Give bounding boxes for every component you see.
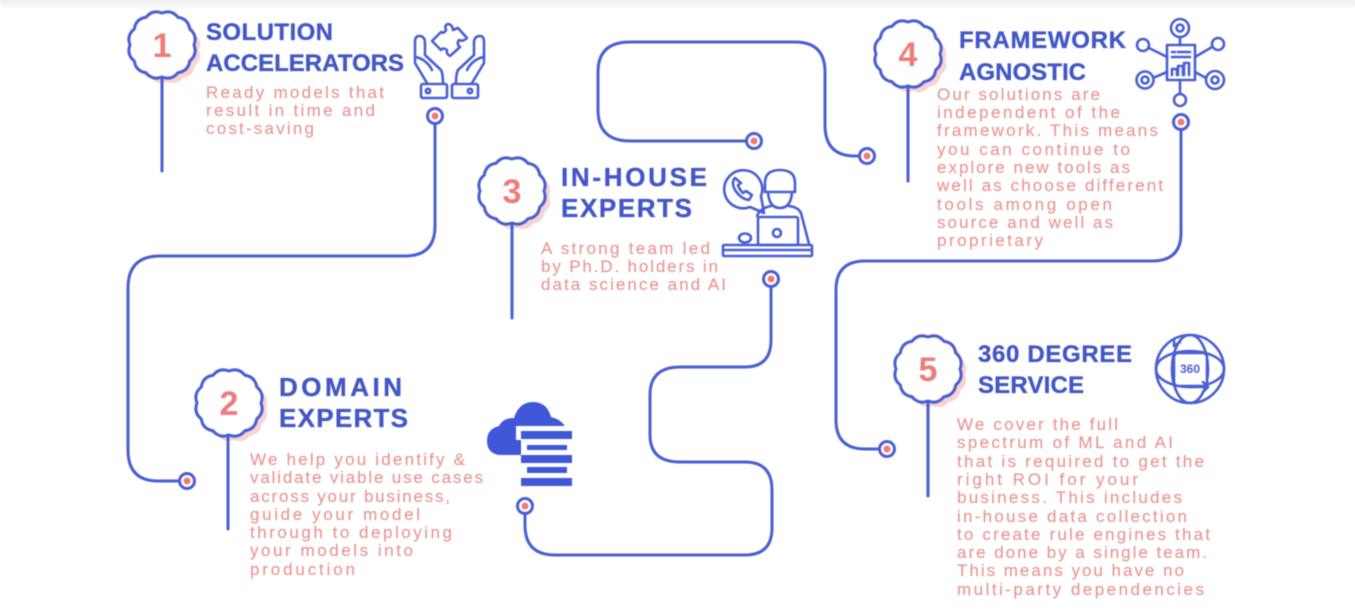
body text: that is required to get the	[957, 452, 1204, 471]
body text: through to deploying	[250, 523, 452, 542]
body text: independent of the	[937, 103, 1120, 122]
body text: right ROI for your	[957, 470, 1138, 489]
heading: ACCELERATORS	[206, 50, 404, 77]
body text	[541, 239, 726, 294]
heading: EXPERTS	[561, 193, 692, 223]
connector: step 1 to step 2	[128, 108, 442, 488]
body text: explore new tools as	[937, 158, 1130, 177]
icon: framework network	[1136, 19, 1224, 106]
heading	[561, 162, 707, 223]
panel: step 1 solution accelerators	[129, 12, 484, 171]
body text: This means you have no	[957, 561, 1184, 580]
connector: step 4 to step 5	[836, 114, 1188, 456]
body text: Ready models that	[206, 83, 384, 102]
heading	[279, 372, 408, 433]
heading: DOMAIN	[279, 372, 402, 402]
icon: hands holding puzzle piece	[415, 24, 484, 98]
badge 4	[875, 21, 946, 181]
panel: step 5 360 degree service	[895, 335, 1224, 599]
panel: step 2 domain experts	[196, 370, 483, 579]
icon: 360 globe	[1156, 335, 1224, 403]
heading: SOLUTION	[206, 19, 333, 46]
badge 5	[895, 336, 966, 496]
heading: AGNOSTIC	[959, 59, 1086, 86]
heading	[959, 27, 1127, 86]
body text: business. This includes	[957, 488, 1182, 507]
connector: step 3 to cloud	[518, 272, 778, 555]
icon: 360 globe: 360	[1180, 362, 1200, 376]
body text: in-house data collection	[957, 507, 1187, 526]
body text: validate viable use cases	[250, 468, 483, 487]
body text: to create rule engines that	[957, 525, 1210, 544]
body text: tools among open	[937, 195, 1112, 214]
heading	[206, 19, 404, 77]
body text: well as choose different	[936, 176, 1163, 195]
body text: by Ph.D. holders in	[541, 257, 718, 276]
badge 1	[129, 12, 200, 171]
heading: EXPERTS	[279, 403, 408, 433]
heading	[978, 341, 1132, 399]
panel: step 3 in-house experts	[479, 158, 812, 318]
body text: your models into	[250, 541, 413, 560]
badge 5: 5	[919, 351, 937, 389]
heading: FRAMEWORK	[959, 27, 1127, 54]
body text: proprietary	[937, 231, 1044, 250]
icon: cloud server stack	[487, 402, 572, 486]
body text: cost-saving	[206, 119, 314, 138]
body text: multi-party dependencies	[957, 580, 1204, 599]
body text: spectrum of ML and AI	[957, 433, 1173, 452]
body text: Our solutions are	[937, 85, 1100, 104]
body text: you can continue to	[937, 140, 1130, 159]
badge 2	[196, 370, 267, 529]
body text: A strong team led	[541, 239, 710, 258]
body text: across your business,	[250, 487, 450, 506]
body text: We help you identify &	[250, 450, 466, 469]
badge 3: 3	[503, 173, 521, 211]
body text: result in time and	[206, 101, 375, 120]
body text	[957, 415, 1210, 599]
badge 4: 4	[899, 36, 918, 74]
body text	[936, 85, 1163, 250]
panel: step 4 framework agnostic	[875, 19, 1224, 250]
body text: production	[250, 560, 355, 579]
body text	[250, 450, 483, 579]
body text: are done by a single team.	[957, 543, 1207, 562]
heading: 360 DEGREE	[978, 341, 1132, 368]
body text	[206, 83, 384, 138]
body text: framework. This means	[937, 121, 1158, 140]
connector: top centre loop	[598, 42, 874, 164]
body text: We cover the full	[957, 415, 1118, 434]
badge 3	[479, 158, 550, 318]
heading: IN-HOUSE	[561, 162, 707, 192]
body text: guide your model	[250, 505, 420, 524]
heading: SERVICE	[978, 372, 1084, 399]
body text: data science and AI	[541, 275, 726, 294]
body text: source and well as	[937, 213, 1113, 232]
icon: support agent at laptop	[723, 170, 812, 256]
badge 2: 2	[220, 385, 238, 423]
badge 1: 1	[153, 27, 171, 65]
